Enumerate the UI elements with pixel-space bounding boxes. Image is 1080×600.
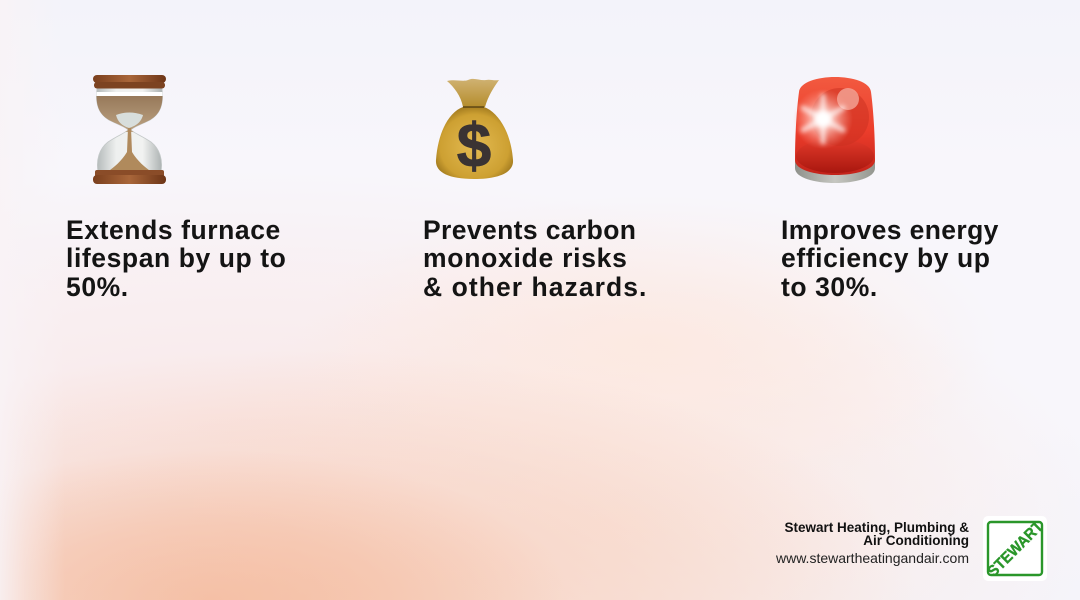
- text: benefit lifespan: 50%.: [66, 272, 129, 302]
- text: benefit safety: Prevents carbon: [423, 214, 636, 244]
- company name: [784, 520, 969, 548]
- text: benefit safety: [423, 214, 647, 302]
- website: www.stewartheatingandair.com: [776, 550, 969, 566]
- icon: hourglass: [93, 75, 166, 184]
- text: benefit lifespan: Extends furnace: [66, 214, 281, 244]
- text: benefit efficiency: to 30%.: [781, 272, 878, 302]
- text: benefit lifespan: lifespan by up to: [66, 243, 286, 273]
- text: benefit efficiency: Improves energy: [781, 214, 999, 244]
- icon: money bag: $: [457, 112, 491, 181]
- text: benefit lifespan: [66, 214, 286, 302]
- icon: money bag: [436, 78, 514, 181]
- text: benefit efficiency: [781, 214, 999, 302]
- text: benefit efficiency: efficiency by up: [781, 243, 991, 273]
- text: benefit safety: & other hazards.: [423, 272, 647, 302]
- text: benefit safety: monoxide risks: [423, 243, 628, 273]
- company name: Air Conditioning: [863, 533, 969, 548]
- icon: red siren: [795, 77, 875, 183]
- company name: Stewart Heating, Plumbing &: [784, 520, 969, 535]
